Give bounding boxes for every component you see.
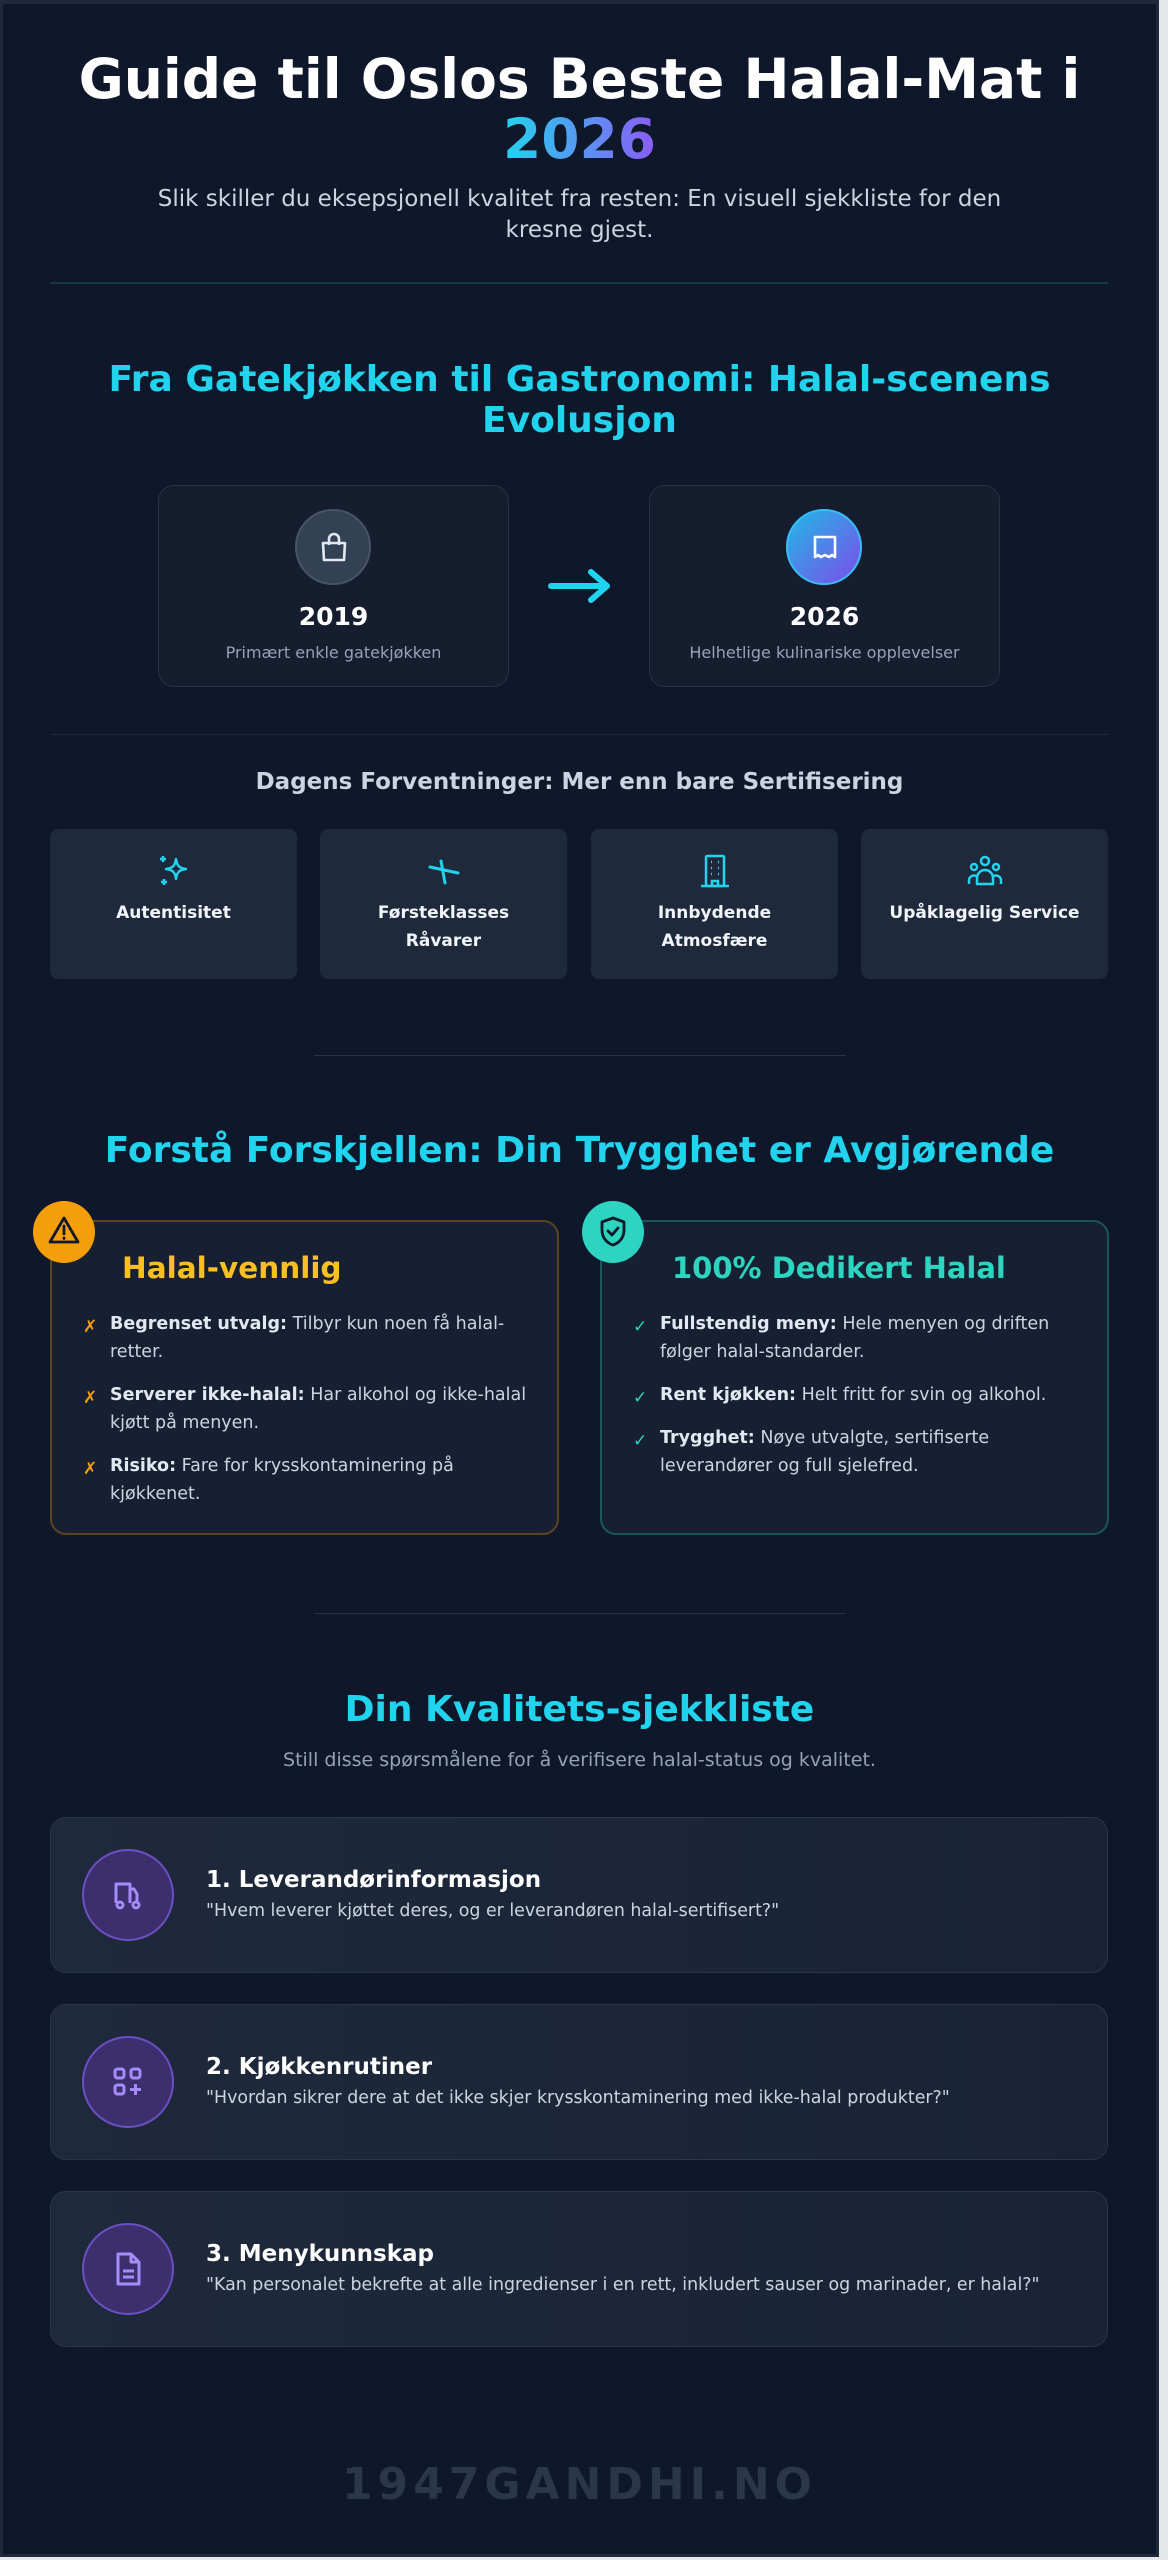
title: Guide til Oslos Beste Halal-Mat i [79, 47, 1080, 111]
checklist item 3 [50, 2191, 1108, 2347]
icon: utensils [428, 860, 460, 884]
card: Atmosfære [591, 829, 838, 979]
heading: checklist: Din Kvalitets-sjekkliste [345, 1689, 814, 1730]
arrow [548, 569, 610, 603]
card: Atmosfære: Atmosfære [662, 931, 767, 951]
title [79, 47, 1080, 171]
icon: warning badge [33, 1201, 95, 1263]
icon: sparkles [160, 856, 188, 885]
card: Service: Upåklagelig Service [889, 903, 1080, 923]
card: 2019: Primært enkle gatekjøkken [226, 643, 441, 662]
heading: differences: Forstå Forskjellen: Din Trygghet er Avgjørende [105, 1130, 1054, 1171]
checklist item 3: "Kan personalet bekrefte at alle ingredienser i en rett, inkludert sauser og marinader, er halal?" [206, 2275, 1040, 2295]
icon: truck [82, 1849, 174, 1941]
card: 2026: 2026 [790, 602, 859, 631]
checklist subtitle: Still disse spørsmålene for å verifisere halal-status og kvalitet. [283, 1749, 876, 1771]
checklist item 1 [50, 1817, 1108, 1973]
panel: dedicated halal [600, 1220, 1109, 1535]
panel: halal-vennlig: ✗ [83, 1459, 97, 1479]
heading: evolution [108, 359, 1050, 441]
icon: users [968, 856, 1002, 886]
card: 2026: Helhetlige kulinariske opplevelser [689, 643, 960, 662]
panel: dedicated halal: ✓ [633, 1317, 647, 1337]
card: 2026 [649, 485, 1000, 687]
panel: dedicated halal: Rent kjøkken: Helt fritt for svin og alkohol. [660, 1385, 1046, 1405]
icon: shopping bag [295, 509, 371, 585]
card: Råvarer [320, 829, 567, 979]
panel: dedicated halal: Trygghet: Nøye utvalgte, sertifiserte leverandører og full sjelefred. [660, 1428, 989, 1476]
card: Råvarer: Førsteklasses [378, 903, 509, 923]
panel: halal-vennlig: Risiko: Fare for krysskontaminering på kjøkkenet. [110, 1456, 454, 1504]
card: Autentisitet [50, 829, 297, 979]
panel: dedicated halal: Fullstendig meny: Hele menyen og driften følger halal-standarder. [660, 1314, 1049, 1362]
heading: evolution: Evolusjon [482, 400, 677, 441]
checklist item 2: "Hvordan sikrer dere at det ikke skjer krysskontaminering med ikke-halal produkter?" [206, 2088, 950, 2108]
heading: expectations: Dagens Forventninger: Mer enn bare Sertifisering [256, 769, 903, 795]
icon: building [701, 854, 729, 888]
panel: halal-vennlig: ✗ [83, 1388, 97, 1408]
card: Service [861, 829, 1108, 979]
title: 2026 [503, 107, 656, 171]
subtitle [158, 186, 1001, 243]
icon: shield badge [582, 1201, 644, 1263]
card: Råvarer: Råvarer [406, 931, 481, 951]
panel: halal-vennlig: Serverer ikke-halal: Har alkohol og ikke-halal kjøtt på menyen. [110, 1385, 526, 1433]
panel: dedicated halal: ✓ [633, 1431, 647, 1451]
checklist item 1: 1. Leverandørinformasjon [206, 1867, 541, 1893]
icon: receipt [786, 509, 862, 585]
footer brand: 1947GANDHI.NO [342, 2459, 817, 2510]
checklist item 2 [50, 2004, 1108, 2160]
card: Autentisitet: Autentisitet [116, 903, 231, 923]
checklist item 3: 3. Menykunnskap [206, 2241, 434, 2267]
card: 2019: 2019 [299, 602, 368, 631]
checklist item 2: 2. Kjøkkenrutiner [206, 2054, 432, 2080]
icon: document [82, 2223, 174, 2315]
panel: halal-vennlig: Halal-vennlig [122, 1251, 342, 1285]
card: 2019 [158, 485, 509, 687]
checklist item 1: "Hvem leverer kjøttet deres, og er leverandøren halal-sertifisert?" [206, 1901, 779, 1921]
panel: dedicated halal: ✓ [633, 1388, 647, 1408]
subtitle: kresne gjest. [506, 217, 653, 243]
panel: halal-vennlig: Begrenset utvalg: Tilbyr kun noen få halal-retter. [110, 1314, 504, 1362]
panel: dedicated halal: 100% Dedikert Halal [672, 1251, 1006, 1285]
panel: halal-vennlig [50, 1220, 559, 1535]
panel: halal-vennlig: ✗ [83, 1317, 97, 1337]
subtitle: Slik skiller du eksepsjonell kvalitet fra resten: En visuell sjekkliste for den [158, 186, 1001, 212]
heading: evolution: Fra Gatekjøkken til Gastronomi: Halal-scenens [108, 359, 1050, 400]
card: Atmosfære: Innbydende [658, 903, 771, 923]
icon: apps plus [82, 2036, 174, 2128]
